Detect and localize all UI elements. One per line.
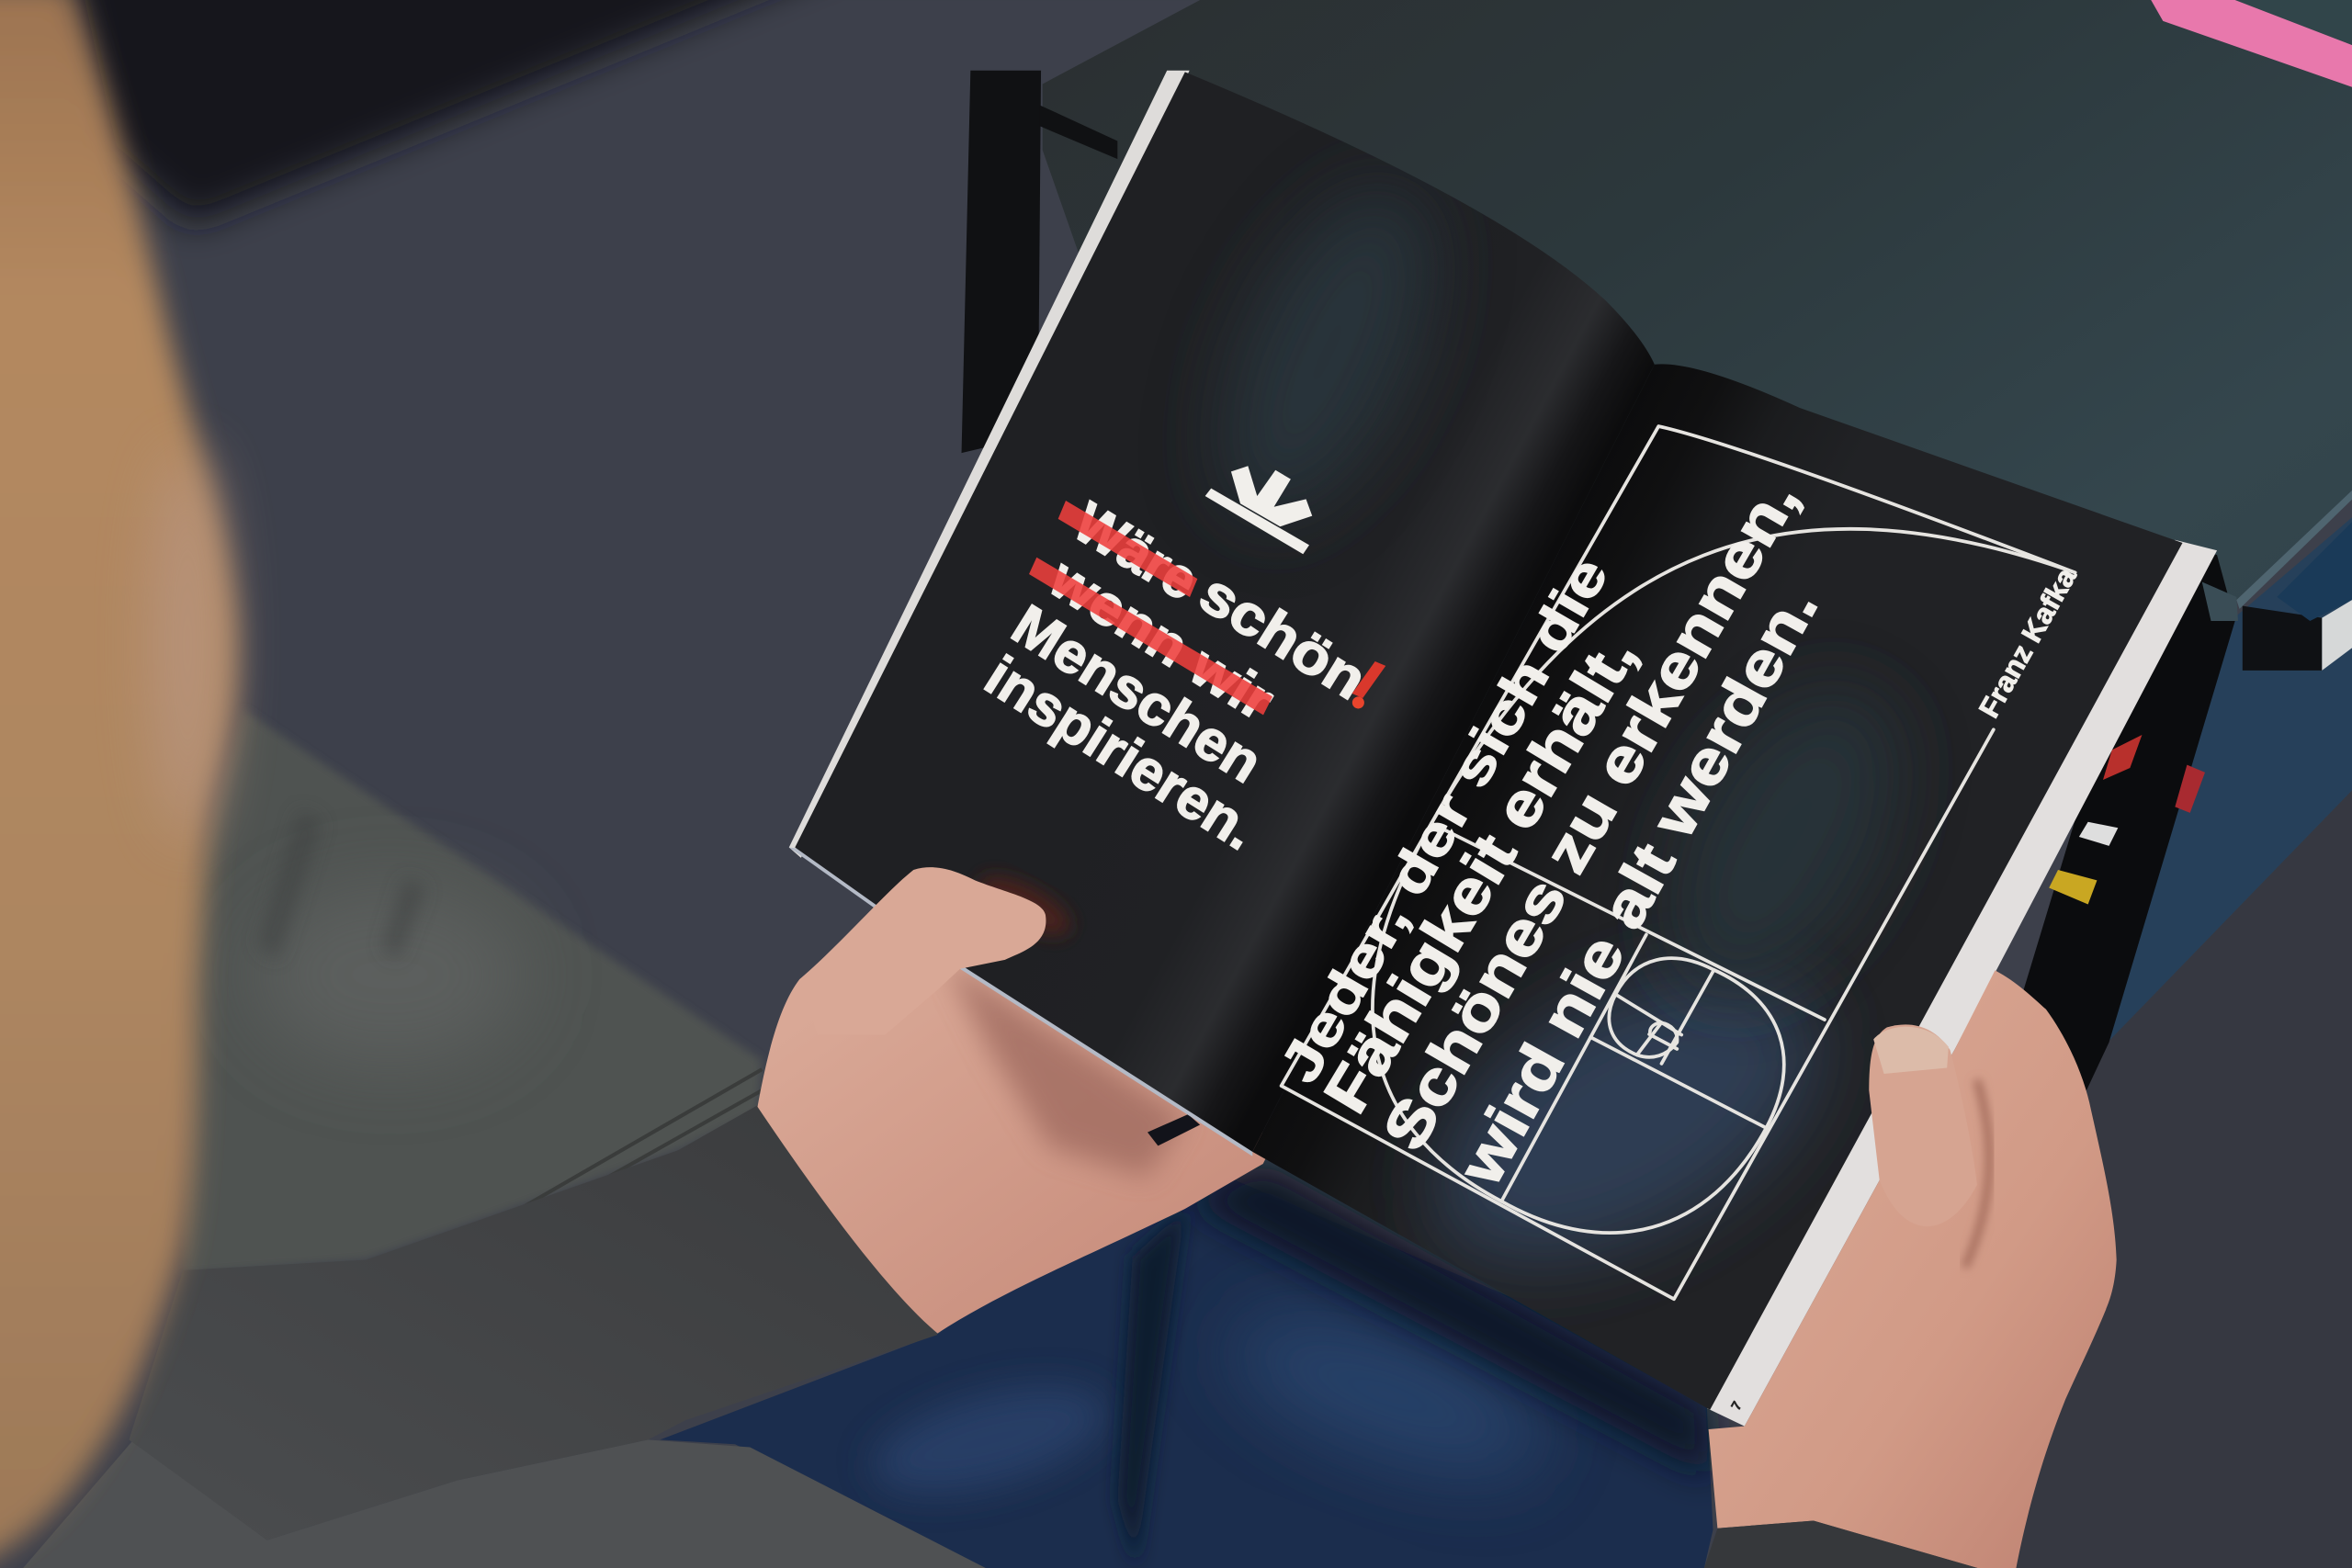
right sleeve: [1704, 1521, 1980, 1568]
headline text: inspirieren.: [974, 644, 1268, 863]
right page: [1252, 364, 2183, 1413]
page sheen: [1408, 695, 1898, 1288]
quote text: wird nie alt werden.: [1445, 576, 1831, 1197]
paper block of the book: [789, 71, 2217, 1427]
jeans: [660, 1140, 1713, 1568]
thumb: [1869, 1024, 1977, 1226]
headline text: Wäre: [1063, 491, 1209, 613]
gap between fingers: [1148, 1114, 1200, 1145]
forearm sleeve: [129, 1105, 937, 1540]
pink magazine: [2151, 0, 2352, 87]
page number: 7: [1729, 1399, 1746, 1413]
book on magazine: [2235, 0, 2352, 45]
shadow from the book: [945, 960, 1185, 1178]
sofa cushion: [183, 709, 762, 1275]
jeans highlights: [1212, 1282, 1563, 1507]
dark sofa, top left: [60, 0, 885, 225]
left thumb: [799, 867, 1046, 1035]
golden ratio frame and spiral: [1282, 426, 2075, 1299]
table top: [1043, 0, 2352, 900]
head: [0, 0, 236, 1568]
author name: Franz Kafka: [1973, 562, 2083, 723]
quote text: [1267, 468, 1831, 1197]
headline text: wenn wir: [1038, 546, 1284, 733]
leather sofa: [183, 709, 762, 1275]
page surface: [795, 72, 1655, 1152]
jeans shadows: [1185, 1162, 1710, 1477]
left palm: [757, 945, 1275, 1333]
left sleeve and shirt: [22, 1105, 987, 1568]
left page: [795, 72, 1655, 1152]
hair and head, blurred foreground: [0, 0, 236, 1568]
quote text: Fähigkeit erhält,: [1311, 624, 1649, 1124]
left page bottom edge: [789, 847, 1252, 1156]
page sheen and reflection: [970, 154, 1478, 947]
books under the table: [2049, 735, 2205, 905]
sofa seam: [517, 1069, 762, 1223]
sofa highlight: [255, 885, 525, 1065]
red strike-throughs and exclamation mark: [1029, 501, 1385, 715]
crease between thumb and fingers: [1965, 1080, 1989, 1268]
lower shelf: [2070, 517, 2352, 1050]
stacked books: [2243, 522, 2352, 671]
right page edge: [1707, 540, 2217, 1427]
table right leg: [2010, 540, 2235, 1090]
lower shirt: [22, 1439, 987, 1568]
quote text: Jeder, der sich die: [1267, 547, 1620, 1093]
face tint: [152, 450, 223, 840]
table edge highlight: [2236, 491, 2352, 609]
table crossbeam: [1039, 105, 1117, 159]
fingers and palm: [1709, 970, 2117, 1568]
leg joint: [2202, 582, 2238, 621]
right hand: [1704, 970, 2117, 1568]
thumbnail: [1873, 1027, 1949, 1074]
palm: [757, 945, 1275, 1333]
coffee table: [962, 0, 2352, 1090]
sofa folds: [258, 810, 426, 960]
table left leg: [962, 71, 1041, 453]
left page edge: [789, 71, 1190, 858]
carpet lower right: [1950, 790, 2352, 1568]
headline text: Menschen: [1001, 593, 1272, 795]
page surface: [1252, 364, 2183, 1410]
logo: sun rays: [1205, 466, 1312, 554]
quote text: Schönes zu erkennen,: [1370, 468, 1812, 1162]
headline text: schön: [1189, 561, 1377, 712]
headline text: [974, 491, 1377, 863]
